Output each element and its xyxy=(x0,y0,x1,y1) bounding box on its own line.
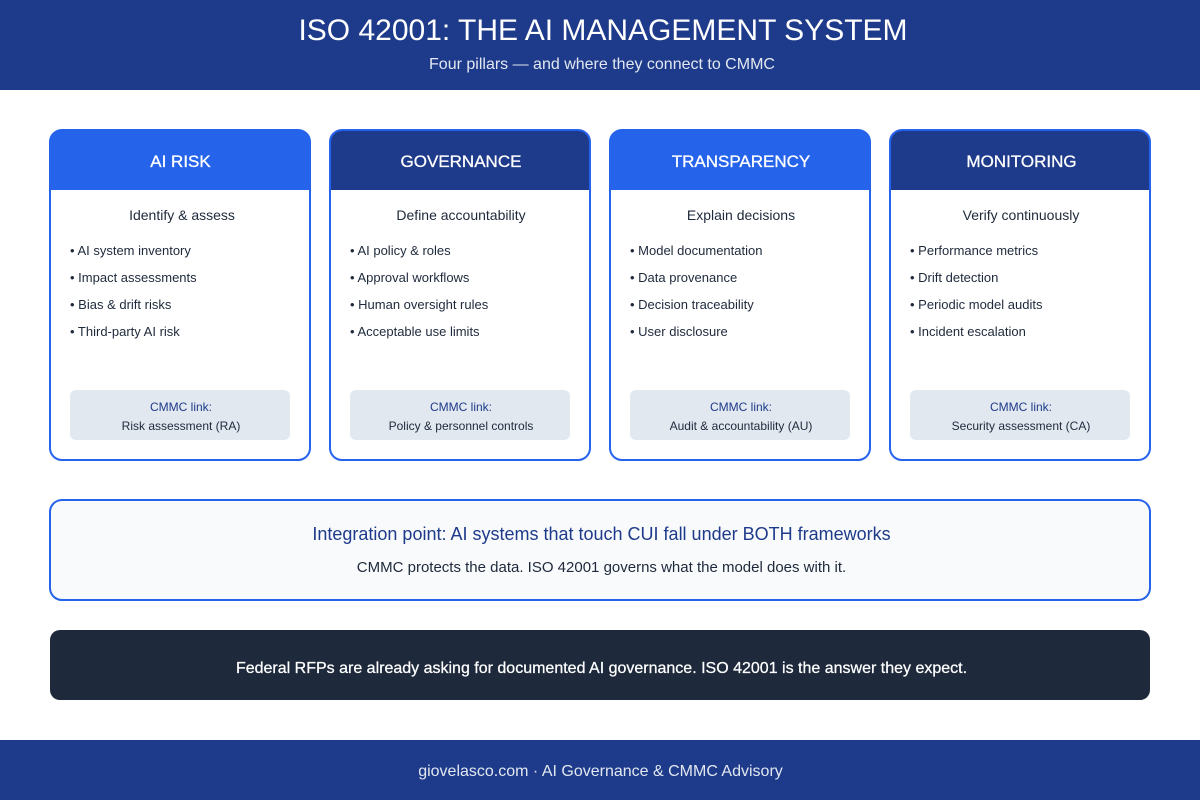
bullet list: • Model documentation xyxy=(630,243,762,258)
bullet list: • Third-party AI risk xyxy=(70,324,180,339)
bullet list: • Drift detection xyxy=(910,270,998,285)
tagline: Identify & assess xyxy=(129,207,235,223)
heading: AI Risk: AI RISK xyxy=(150,152,211,171)
footer xyxy=(0,740,1200,800)
tagline: Define accountability xyxy=(396,207,526,223)
bullet list: • Impact assessments xyxy=(70,270,197,285)
bullet list: • Bias & drift risks xyxy=(70,297,172,312)
CMMC link box xyxy=(910,390,1130,440)
CMMC link box xyxy=(630,390,850,440)
integration heading: Integration point: AI systems that touch CUI fall under BOTH frameworks xyxy=(312,524,891,544)
heading: Transparency xyxy=(610,130,870,190)
bullet list: • Performance metrics xyxy=(910,243,1039,258)
CMMC link box: CMMC link: xyxy=(710,400,772,414)
heading: Governance: GOVERNANCE xyxy=(401,152,521,171)
header band xyxy=(0,0,1200,90)
heading: AI Risk xyxy=(50,130,310,190)
integration text: CMMC protects the data. ISO 42001 governs what the model does with it. xyxy=(357,559,846,576)
CMMC link box: CMMC link: xyxy=(150,400,212,414)
panel: AI Risk xyxy=(50,130,310,460)
CMMC link box: Risk assessment (RA) xyxy=(122,419,240,433)
bullet list: • Approval workflows xyxy=(350,270,470,285)
CMMC link box: Policy & personnel controls xyxy=(389,419,533,433)
bullet list: • Incident escalation xyxy=(910,324,1026,339)
panel: integration point xyxy=(50,500,1150,600)
CMMC link box: CMMC link: xyxy=(430,400,492,414)
tagline: Verify continuously xyxy=(963,207,1079,223)
heading: Governance xyxy=(330,130,590,190)
heading: Monitoring: MONITORING xyxy=(966,152,1077,171)
CMMC link box: Security assessment (CA) xyxy=(952,419,1090,433)
bullet list xyxy=(910,243,1043,339)
CMMC link box xyxy=(350,390,570,440)
panel: Governance xyxy=(330,130,590,460)
bullet list: • Periodic model audits xyxy=(910,297,1043,312)
callout banner: Federal RFPs are already asking for documented AI governance. ISO 42001 is the answer they expect. xyxy=(236,660,967,677)
panel: Transparency xyxy=(610,130,870,460)
tagline: Explain decisions xyxy=(687,207,795,223)
bullet list: • Human oversight rules xyxy=(350,297,489,312)
bullet list xyxy=(350,243,489,339)
bullet list: • AI policy & roles xyxy=(350,243,451,258)
bullet list: • Decision traceability xyxy=(630,297,754,312)
heading: Transparency: TRANSPARENCY xyxy=(672,152,810,171)
subtitle: Four pillars — and where they connect to CMMC xyxy=(429,56,775,73)
bullet list: • AI system inventory xyxy=(70,243,191,258)
title: ISO 42001: THE AI MANAGEMENT SYSTEM xyxy=(298,14,908,47)
bullet list: • Data provenance xyxy=(630,270,737,285)
CMMC link box: CMMC link: xyxy=(990,400,1052,414)
panel: Monitoring xyxy=(890,130,1150,460)
heading: Monitoring xyxy=(890,130,1150,190)
bullet list: • Acceptable use limits xyxy=(350,324,480,339)
bullet list xyxy=(630,243,762,339)
footer: giovelasco.com · AI Governance & CMMC Advisory xyxy=(418,763,783,780)
CMMC link box xyxy=(70,390,290,440)
bullet list: • User disclosure xyxy=(630,324,728,339)
callout banner xyxy=(50,630,1150,700)
bullet list xyxy=(70,243,197,339)
CMMC link box: Audit & accountability (AU) xyxy=(670,419,812,433)
